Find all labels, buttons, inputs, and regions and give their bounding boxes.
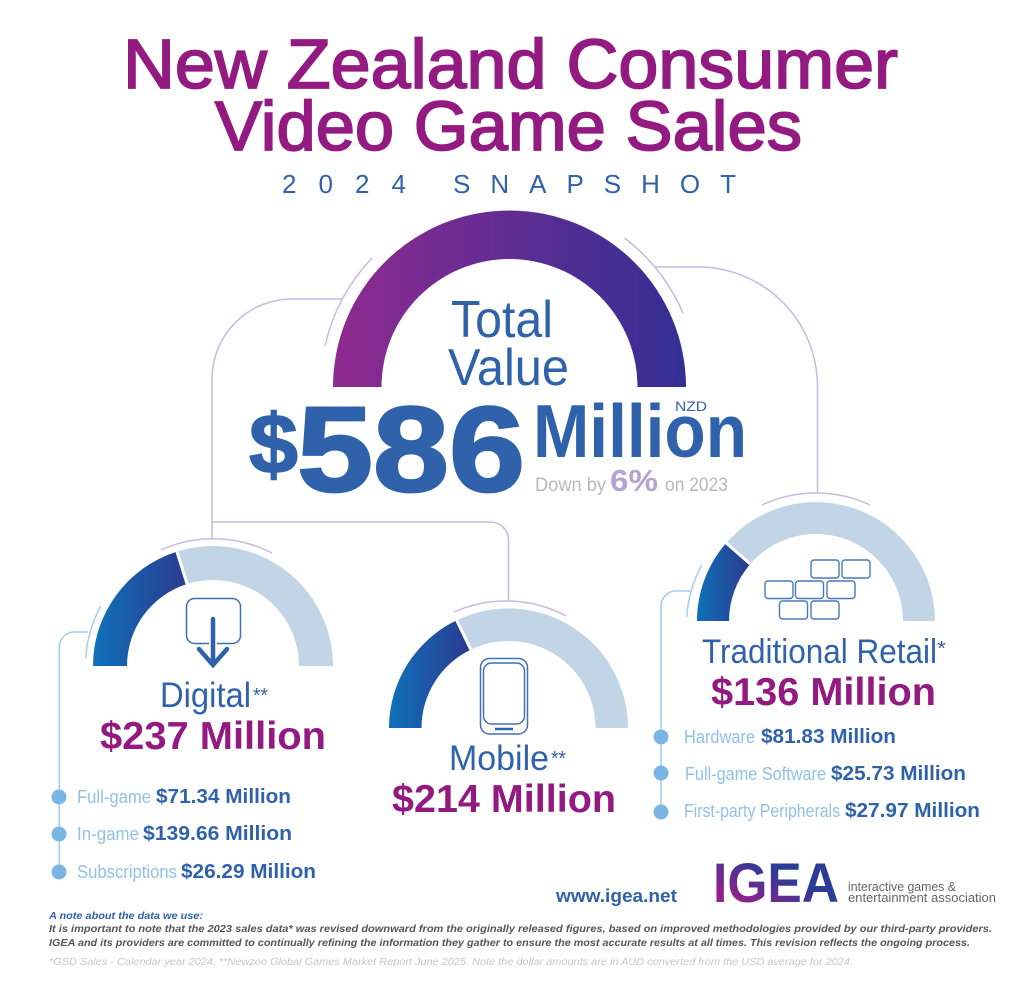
total value gauge [325, 210, 686, 387]
icon: download arrow [186, 598, 240, 666]
retail breakdown list: $25.73 Million [831, 763, 966, 785]
logo: IGEA: interactive games & [848, 880, 957, 894]
website url: www.igea.net [555, 886, 677, 906]
digital breakdown list: Full-game [77, 787, 151, 807]
digital breakdown list: $139.66 Million [143, 823, 292, 845]
connector: total to digital and mobile [212, 299, 508, 601]
mobile amount: $214 Million [392, 778, 616, 821]
digital breakdown list [52, 606, 316, 883]
connector: total to traditional retail [655, 267, 818, 493]
digital breakdown list: Subscriptions [77, 862, 177, 882]
subtitle: SNAPSHOT [453, 169, 736, 199]
data note: IGEA and its providers are committed to continually refining the information they gather to ensure the most accurate results at all times. This revision reflects the ongoing process. [49, 938, 970, 949]
total value label [448, 291, 569, 397]
retail label: * [937, 638, 946, 660]
total value amount: $ [249, 397, 298, 491]
logo: IGEA: IGEA [713, 851, 839, 914]
year on year change: Down by [535, 475, 606, 496]
icon: phone [480, 658, 528, 734]
panel: digital [52, 539, 333, 883]
year on year change: on 2023 [665, 475, 728, 496]
retail breakdown list: First-party Peripherals [684, 801, 840, 821]
subtitle [282, 169, 736, 199]
icon: bricks [765, 560, 870, 619]
year on year change: 6% [610, 463, 658, 498]
retail breakdown list: Hardware [684, 727, 755, 747]
retail amount: $136 Million [711, 671, 936, 714]
panel: traditional retail [654, 493, 980, 822]
retail breakdown list: $27.97 Million [845, 800, 980, 822]
retail breakdown list [654, 565, 980, 822]
title: New Zealand Consumer [123, 25, 898, 103]
logo: IGEA [713, 851, 996, 914]
retail label: Traditional Retail [702, 633, 937, 671]
logo: IGEA: entertainment association [848, 891, 996, 905]
footnote: *GSD Sales - Calendar year 2024. **Newzoo Global Games Market Report June 2025. Note the dollar amounts are in AUD converted from the USD average for 2024. [49, 957, 853, 968]
digital amount: $237 Million [100, 715, 326, 758]
mobile label: ** [551, 748, 566, 770]
total value amount: Million [533, 389, 747, 473]
mobile gauge [389, 601, 628, 728]
digital label: Digital [160, 676, 251, 715]
total value amount: 586 [297, 381, 525, 517]
subtitle: 2024 [282, 169, 406, 199]
digital label: ** [253, 685, 268, 707]
digital breakdown list: $26.29 Million [181, 861, 316, 883]
mobile label: Mobile [449, 739, 549, 778]
digital breakdown list: $71.34 Million [156, 786, 291, 808]
title: Video Game Sales [215, 87, 802, 165]
data note: A note about the data we use: [48, 911, 203, 922]
panel: mobile [389, 601, 628, 821]
total value amount [249, 381, 747, 517]
title [123, 25, 898, 165]
retail breakdown list: Full-game Software [685, 764, 826, 784]
currency note: NZD [675, 399, 707, 414]
digital gauge [93, 539, 333, 666]
total value label: Value [448, 339, 569, 397]
total value label: Total [451, 291, 553, 349]
digital breakdown list: In-game [77, 824, 139, 844]
retail breakdown list: $81.83 Million [761, 726, 896, 748]
retail gauge [697, 493, 935, 621]
year on year change [535, 463, 728, 498]
data note: It is important to note that the 2023 sales data* was revised downward from the originally released figures, based on improved methodologies provided by our third-party providers. [49, 924, 992, 935]
data note [48, 911, 992, 949]
